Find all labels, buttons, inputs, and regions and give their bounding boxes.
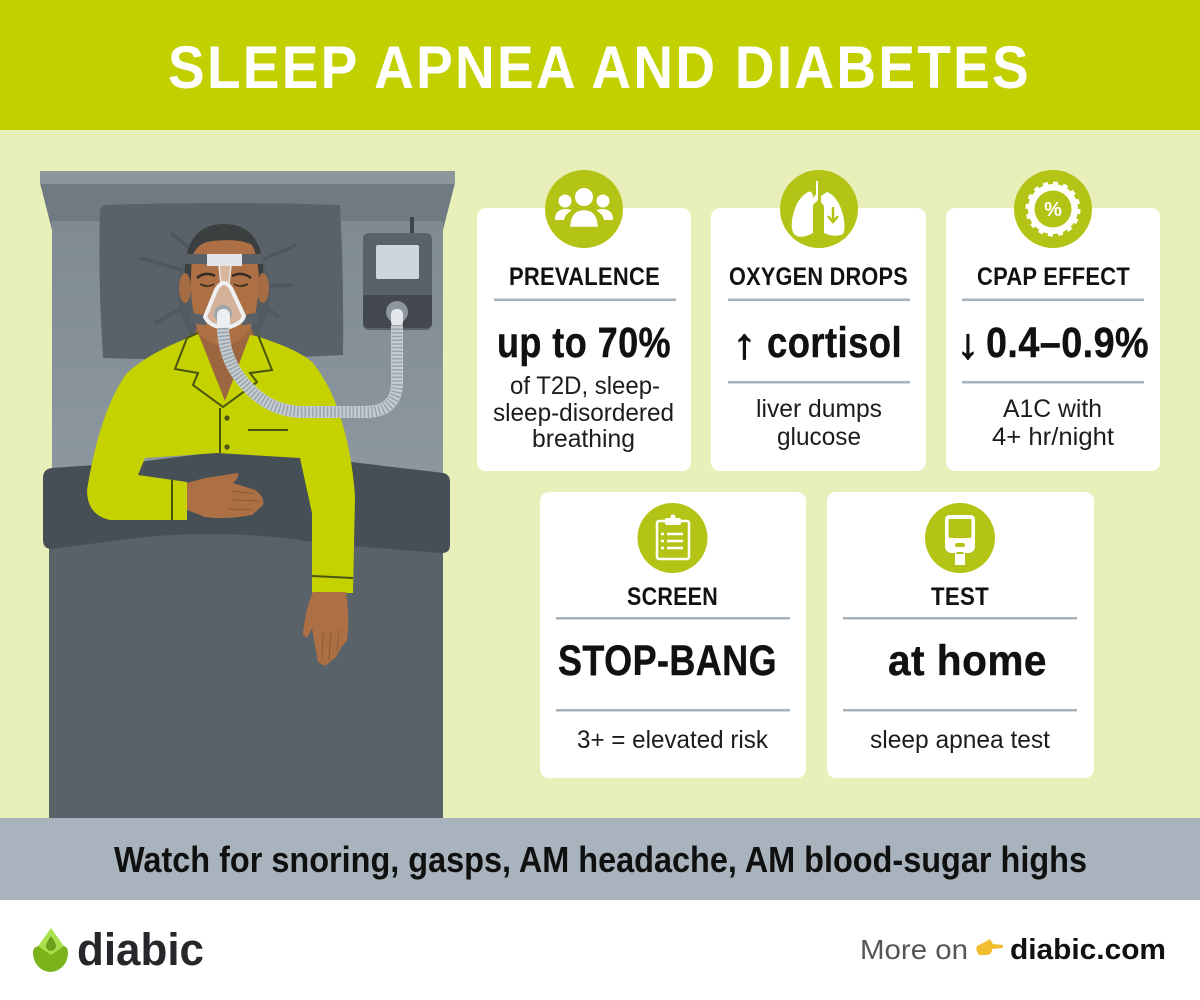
value: ↑ (733, 320, 756, 367)
heading: CPAP EFFECT (977, 263, 1130, 291)
head strap (183, 254, 263, 325)
value (733, 319, 902, 367)
heading: SCREEN (627, 583, 718, 611)
description (992, 395, 1114, 451)
pajama top (87, 333, 355, 593)
description: 3+ = elevated risk (577, 726, 768, 754)
icon: drop (33, 928, 68, 972)
panel: screen (540, 492, 806, 778)
description: glucose (777, 423, 861, 451)
footer (0, 900, 1200, 1000)
hand on chest (187, 473, 263, 518)
icon: percent badge: % (1044, 199, 1062, 221)
icon: lungs (780, 170, 858, 248)
panel: prevalence (477, 170, 691, 471)
warning band: Watch for snoring, gasps, AM headache, AM blood-sugar highs (114, 839, 1087, 880)
value: cortisol (767, 319, 902, 367)
icon: people (545, 170, 623, 248)
warning band (0, 818, 1200, 900)
description: A1C with (1003, 395, 1102, 423)
value: up to 70% (497, 319, 671, 367)
CPAP mask (205, 265, 244, 329)
heading: OXYGEN DROPS (729, 263, 908, 291)
icon: percent badge (1014, 170, 1092, 248)
description (756, 395, 882, 451)
CPAP machine (363, 217, 432, 330)
value: ↓ (957, 320, 979, 367)
icon: pointing hand (976, 939, 1003, 955)
heading: TEST (931, 583, 989, 611)
description: 4+ hr/night (992, 423, 1114, 451)
headboard (40, 171, 455, 230)
description: of T2D, sleep- (510, 372, 660, 400)
bed sheet (52, 221, 443, 491)
description: sleep-disordered (493, 399, 674, 427)
illustration: man sleeping in bed with CPAP (40, 171, 455, 818)
icon: glucose meter (925, 503, 995, 573)
link: more on diabic.com: diabic.com (1010, 934, 1166, 966)
description: liver dumps (756, 395, 882, 423)
logo: diabic: diabic (77, 924, 204, 975)
description (493, 372, 674, 453)
pillow (99, 203, 343, 359)
description: sleep apnea test (870, 726, 1050, 754)
heading: PREVALENCE (509, 263, 660, 291)
title: SLEEP APNEA AND DIABETES (168, 34, 1031, 101)
link: more on diabic.com (860, 934, 1166, 966)
lower blanket (49, 520, 443, 818)
value: STOP-BANG (558, 637, 777, 685)
icon: clipboard (638, 503, 708, 573)
value: at home (888, 637, 1047, 685)
CPAP hose (223, 325, 397, 412)
description: breathing (532, 425, 635, 453)
eyebrows and closed eyes (197, 274, 251, 286)
head (179, 224, 269, 346)
header banner (0, 0, 1200, 130)
panel: CPAP effect (946, 170, 1160, 471)
value: 0.4–0.9% (986, 319, 1149, 367)
panel: oxygen drops (711, 170, 926, 471)
link: more on diabic.com: More on (860, 934, 968, 965)
blanket fold (43, 452, 450, 553)
hanging hand (303, 592, 348, 666)
panel: test (827, 492, 1094, 778)
neck (192, 320, 256, 412)
